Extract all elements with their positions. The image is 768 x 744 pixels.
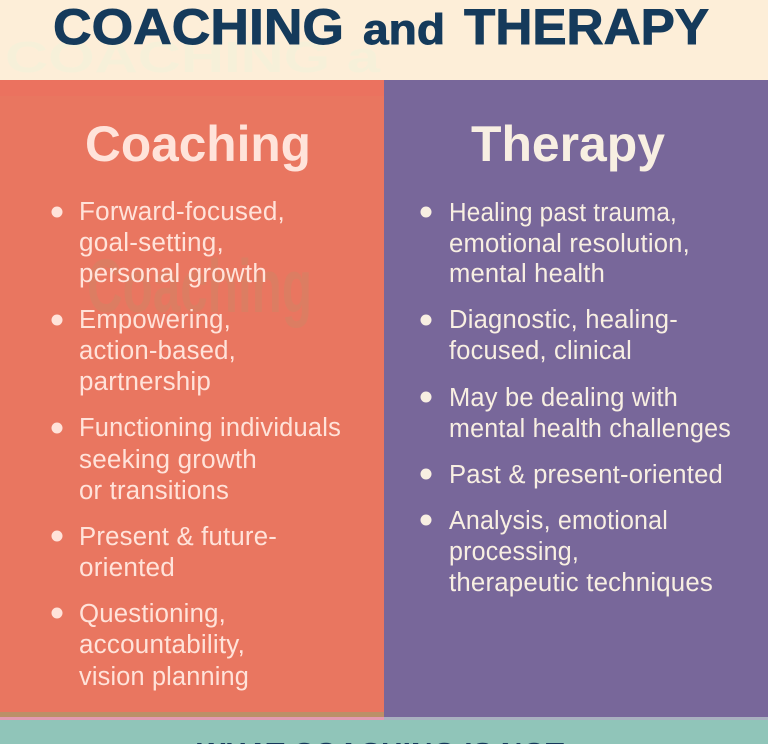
coaching list: vision planning	[79, 663, 249, 691]
title: THERAPY	[464, 0, 709, 55]
title	[53, 0, 709, 55]
heading: therapy: Therapy	[471, 116, 665, 172]
therapy list: processing,	[449, 538, 579, 566]
therapy list: emotional resolution,	[449, 230, 690, 258]
therapy list: Past & present-oriented	[449, 461, 723, 489]
panel: coaching	[0, 80, 384, 720]
therapy list: therapeutic techniques	[449, 569, 713, 597]
coaching list: partnership	[79, 368, 211, 396]
therapy list: mental health	[449, 260, 605, 288]
title: and	[363, 6, 445, 54]
title: COACHING	[53, 0, 344, 55]
ghost artifact: coaching: Coaching	[87, 244, 312, 328]
therapy list: Diagnostic, healing-	[449, 306, 678, 334]
therapy list: May be dealing with	[449, 384, 678, 412]
therapy list: Analysis, emotional	[449, 507, 668, 535]
coaching list: Forward-focused,	[79, 198, 285, 226]
coaching list: Functioning individuals	[79, 414, 341, 442]
coaching list: accountability,	[79, 631, 245, 659]
footer band	[0, 720, 768, 744]
coaching list: oriented	[79, 554, 175, 582]
therapy list: focused, clinical	[449, 337, 632, 365]
coaching list: seeking growth	[79, 446, 257, 474]
therapy list	[420, 199, 731, 597]
therapy list: mental health challenges	[449, 415, 731, 443]
coaching list: goal-setting,	[79, 229, 224, 257]
coaching list: Present & future-	[79, 523, 277, 551]
heading: coaching: Coaching	[85, 116, 311, 172]
coaching list: personal growth	[79, 260, 267, 288]
coaching list: Empowering,	[79, 306, 231, 334]
coaching list: action-based,	[79, 337, 236, 365]
coaching list	[52, 198, 341, 691]
coaching list: or transitions	[79, 477, 229, 505]
coaching list: Questioning,	[79, 600, 226, 628]
therapy list: Healing past trauma,	[449, 199, 677, 227]
header band	[0, 0, 768, 80]
header ghost artifact: COACHING a	[5, 33, 381, 82]
panel: therapy	[384, 80, 768, 720]
